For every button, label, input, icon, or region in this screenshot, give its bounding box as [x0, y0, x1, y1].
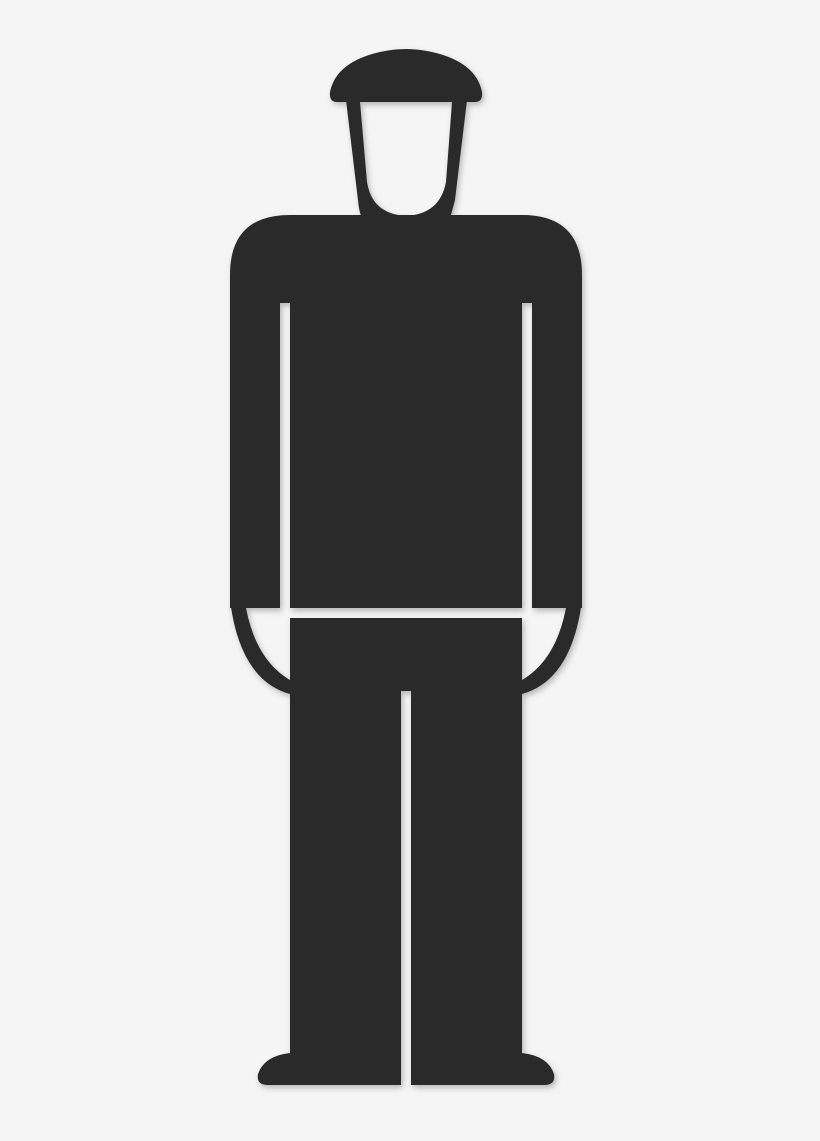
torso with arms: [230, 215, 582, 608]
left hand: [230, 600, 290, 694]
cap: [330, 49, 482, 102]
figure: [230, 49, 582, 1085]
left leg with shoe: [258, 618, 401, 1085]
right leg with shoe: [411, 618, 554, 1085]
face outline: [346, 100, 467, 218]
right hand: [522, 600, 582, 694]
crotch bridge: [400, 618, 412, 691]
